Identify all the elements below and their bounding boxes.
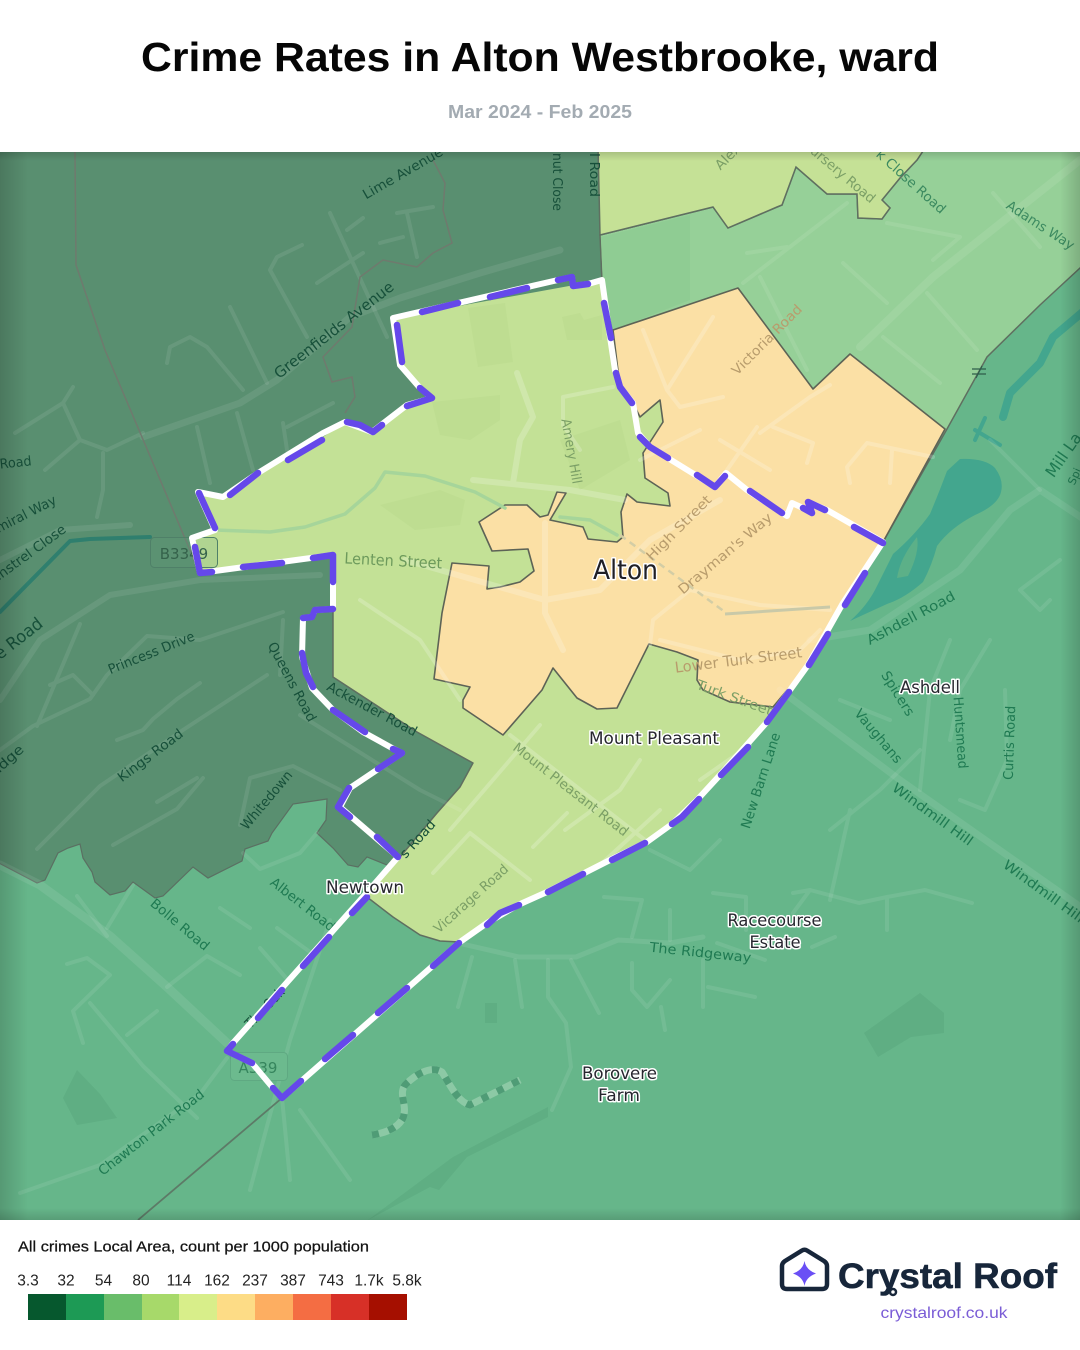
street name labels: Curtis Road [1001, 706, 1019, 780]
street name labels: Chawton Park Road [95, 1087, 208, 1179]
legend scale values: 114 [167, 1272, 192, 1290]
street name labels: Kings Road [115, 726, 187, 786]
street name labels: High Street [643, 492, 715, 564]
parks inside ward [380, 303, 630, 530]
subtitle: date range: Mar 2024 - Feb 2025 [448, 102, 632, 122]
road shield: A339 [230, 1052, 288, 1080]
street name labels: k Close Road [873, 147, 949, 217]
street name labels: Mount Pleasant Road [510, 740, 631, 840]
place label: Ashdell: Ashdell [900, 678, 960, 698]
shaded woodland and farmland [376, 994, 944, 1214]
street name labels: Adams Way [1003, 198, 1077, 254]
street network: green areas [0, 160, 1080, 1193]
legend scale values: 743 [318, 1272, 344, 1290]
legend scale values: 1.7k [354, 1272, 384, 1290]
region: mid green north-east [600, 145, 1080, 542]
street name labels: Vaughans [851, 706, 905, 767]
street network: ward and town centre [360, 317, 933, 880]
place label: Racecourse Estate: Estate [750, 933, 800, 953]
street name labels: Greenfields Avenue [270, 278, 397, 382]
legend scale values: 54 [95, 1272, 112, 1290]
legend scale values: 237 [242, 1272, 268, 1290]
legend scale values: 80 [132, 1272, 150, 1290]
street name labels: The Oak [241, 985, 288, 1032]
street name labels: Queens Road [264, 640, 319, 725]
legend scale values [17, 1272, 422, 1290]
title: Crime Rates in Alton Westbrooke, ward [141, 34, 939, 80]
region: ward yellow green [196, 284, 774, 941]
street name labels: Spicers [877, 668, 917, 719]
region: low crime north-west (dark green) [0, 145, 602, 898]
place label: Mount Pleasant: Mount Pleasant [589, 729, 719, 749]
logo: Crystal Roof [782, 1250, 1057, 1322]
street name labels: Ashdell Road [864, 588, 958, 649]
street name labels: Victoria Road [729, 302, 806, 379]
water: lake [850, 459, 1002, 621]
legend scale values: 162 [204, 1272, 230, 1290]
water: rivers and streams [0, 310, 1080, 612]
street name labels: Huntsmead [949, 696, 970, 769]
street name labels: Drayman's Way [675, 510, 776, 598]
road shield: A339: A339 [239, 1059, 277, 1077]
street name labels: Princess Drive [106, 629, 197, 678]
public footpaths and railway lines [75, 152, 986, 1220]
region: top yellow green [598, 145, 927, 235]
street name labels: s Road [397, 817, 439, 862]
street name labels: Amery Hill [557, 417, 585, 485]
legend colour ramp [28, 1294, 407, 1320]
street name labels: Turk Street [693, 677, 775, 719]
legend title: All crimes Local Area, count per 1000 population [18, 1238, 369, 1256]
website: crystalroof.co.uk [880, 1305, 1009, 1322]
street name labels: Vicarage Road [431, 861, 512, 937]
place label: Borovere Farm: Farm [598, 1086, 640, 1106]
place label: Racecourse Estate: Racecourse [728, 911, 822, 931]
place label: Racecourse Estate [728, 911, 822, 953]
street name labels [0, 141, 1080, 1179]
street name labels: The Ridgeway [648, 940, 752, 966]
road shield: B3349: B3349 [160, 545, 208, 563]
map panel [0, 141, 1080, 1220]
street name labels: Windmill Hill [889, 780, 976, 849]
street name labels: ursery Road [807, 143, 878, 207]
place label: Newtown: Newtown [326, 878, 404, 898]
place label: Borovere Farm [582, 1064, 657, 1106]
place label: Alton: Alton [593, 555, 658, 586]
ward boundary: white line [192, 277, 883, 1098]
street name labels: l Road [586, 153, 602, 197]
icon: key tail on the y [890, 1289, 896, 1295]
water: island [897, 537, 918, 578]
place label: Borovere Farm: Borovere [582, 1064, 657, 1084]
street name labels: Lower Turk Street [674, 643, 803, 677]
legend scale values: 387 [280, 1272, 306, 1290]
region: high crime town centre (orange) [434, 288, 945, 735]
legend [17, 1238, 422, 1320]
legend scale values: 3.3 [17, 1272, 39, 1290]
street name labels: Bolle Road [147, 896, 212, 954]
street name labels: Lenten Street [344, 549, 443, 573]
icon: house with star [782, 1250, 827, 1289]
ward boundary: purple dashes [195, 277, 883, 1098]
street name labels: Alex [712, 141, 744, 173]
street name labels: New Barn Lane [738, 731, 784, 831]
street name labels: nut Close [549, 153, 565, 211]
brand name: Crystal Roof [838, 1257, 1057, 1296]
legend scale values: 32 [57, 1272, 75, 1290]
street name labels: Windmill Hill [1000, 857, 1080, 926]
street name labels: Whitedown [238, 768, 296, 833]
street name labels: Ackender Road [324, 679, 420, 740]
residential strip [601, 244, 616, 329]
street name labels: Albert Road [267, 875, 338, 935]
legend scale values: 5.8k [392, 1272, 422, 1290]
footpath ruins dashed trail [372, 1070, 520, 1135]
street name labels: Lime Avenue [360, 144, 446, 203]
ward edge with surrounding area [333, 609, 473, 942]
road shield: B3349 [150, 538, 218, 568]
